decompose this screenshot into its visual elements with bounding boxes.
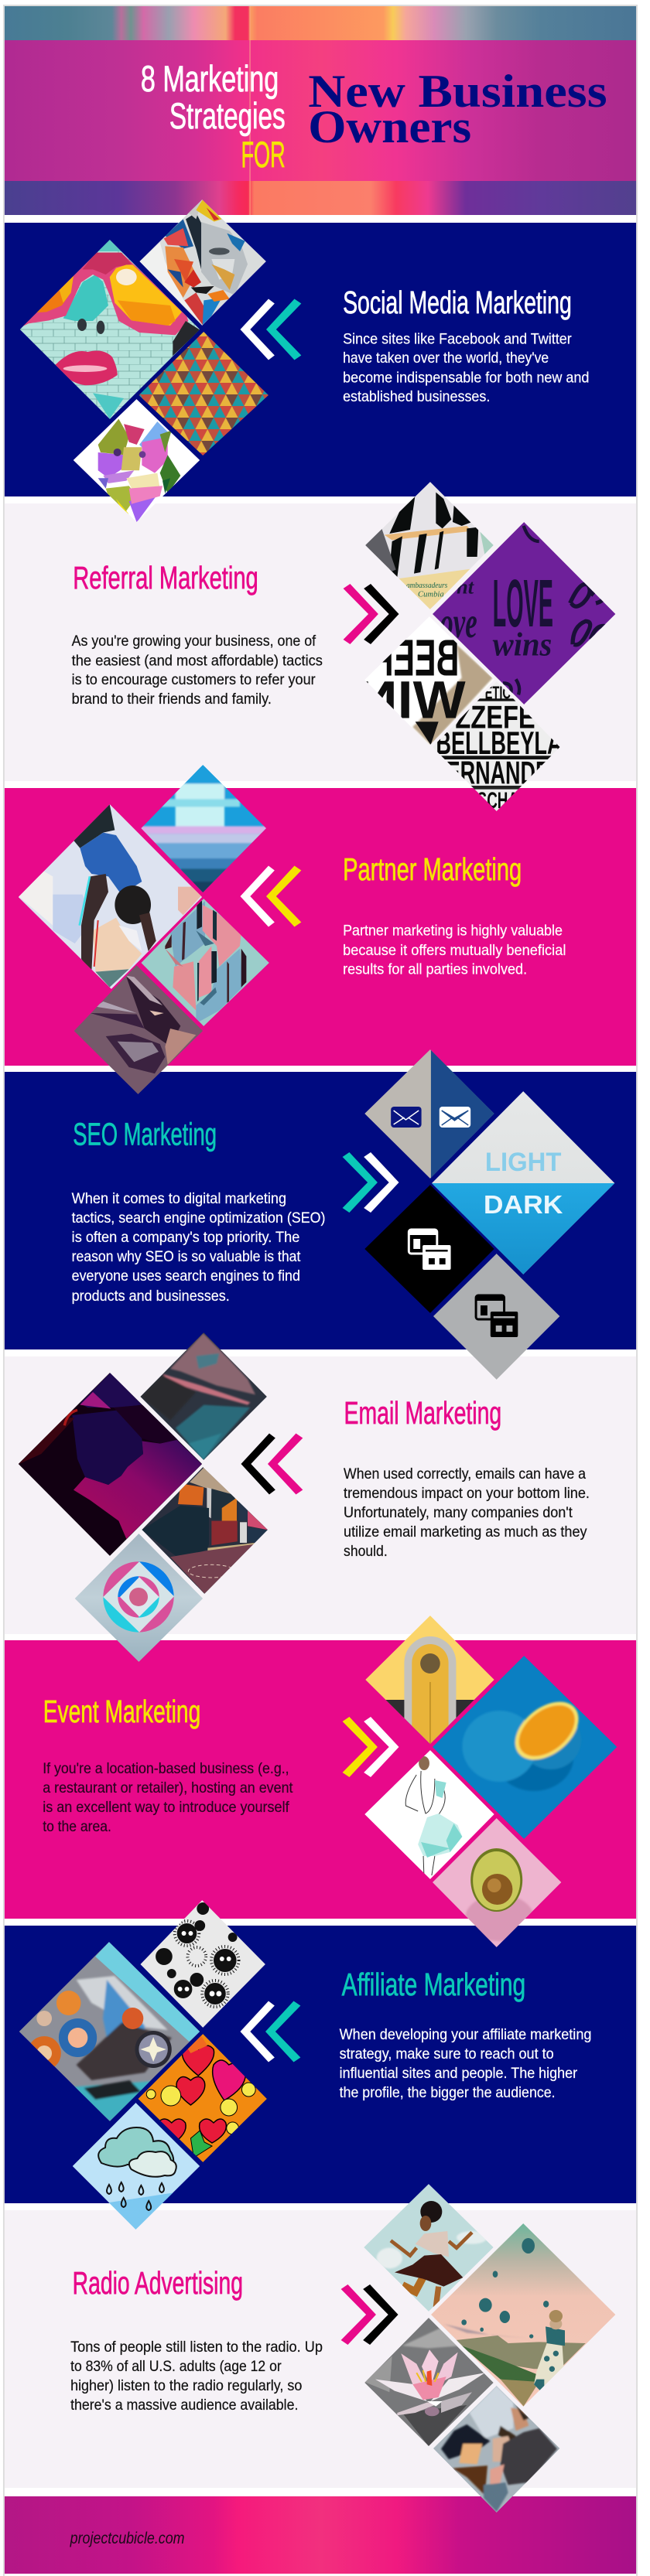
- panel background: SEO: [5, 1072, 636, 1349]
- panel background: social media: [5, 223, 636, 496]
- icon: double chevron: [343, 1717, 399, 1777]
- image: pink and teal architecture: [141, 899, 269, 1026]
- image: soot sprites: [140, 1900, 265, 2028]
- image: colourful cat: [74, 399, 200, 523]
- heading: Email Marketing: [344, 1395, 501, 1431]
- image: lettering poster: Cumbia: [418, 591, 444, 599]
- body text: [70, 2339, 323, 2413]
- image: love wins lettering: [433, 522, 615, 705]
- panel: social media marketing: [18, 200, 589, 523]
- body text: Since sites like Facebook and Twitter: [343, 330, 572, 347]
- body text: higher) listen to the radio regularly, so: [70, 2377, 302, 2393]
- body text: Tons of people still listen to the radio. Up: [70, 2339, 323, 2355]
- image: lettering poster: ambassadeurs: [406, 582, 447, 590]
- title: 8 Marketing Strategies for: [141, 59, 286, 175]
- image: abstract circle logo: [75, 1534, 203, 1662]
- image: dress sketch: [364, 1750, 494, 1879]
- body text: When it comes to digital marketing: [72, 1190, 286, 1206]
- icon: double chevron: [240, 866, 301, 926]
- image: dancing woman: [364, 2184, 494, 2312]
- body text: results for all parties involved.: [343, 960, 527, 978]
- body text: to the area.: [43, 1818, 111, 1834]
- image: person in magenta light: [19, 1373, 202, 1556]
- image: mirrored black letters: BEEF: [374, 629, 459, 687]
- body text: [43, 1760, 293, 1834]
- image: colourful painting: [19, 1942, 200, 2121]
- image: blurred teal and pink: [140, 1332, 267, 1460]
- image: light and dark brick with envelopes: [364, 1049, 494, 1179]
- heading: Radio Advertising: [73, 2265, 243, 2301]
- image: typography collage: ERNANDE: [446, 754, 549, 790]
- body text: When used correctly, emails can have a: [344, 1465, 586, 1482]
- body text: the profile, the bigger the audience.: [340, 2084, 556, 2100]
- image: triangle pattern: [139, 332, 269, 455]
- body text: tremendous impact on your bottom line.: [344, 1485, 590, 1501]
- body text: brand to their friends and family.: [72, 691, 272, 707]
- icon: double chevron: [240, 299, 301, 360]
- image: light and dark typography: LIGHT: [485, 1148, 562, 1177]
- title: 8 Marketing Strategies for: FOR: [241, 135, 286, 175]
- title: 8 Marketing Strategies for: Strategies: [169, 96, 286, 136]
- image: low-poly shape: [74, 965, 203, 1094]
- image: graffiti portrait: [139, 200, 266, 326]
- body text: If you're a location-based business (e.g.,: [43, 1760, 289, 1776]
- body text: [72, 633, 323, 707]
- image: typography collage: ETIC: [485, 682, 511, 702]
- body text: have taken over the world, they've: [343, 350, 549, 366]
- body text: the easiest (and most affordable) tactics: [72, 652, 323, 669]
- title: New Business Owners: Owners: [308, 101, 471, 152]
- body text: because it offers mutually beneficial: [343, 942, 566, 958]
- icon: double chevron: [240, 2001, 300, 2062]
- body text: As you're growing your business, one of: [72, 633, 316, 649]
- panel: radio advertising: [70, 2184, 615, 2513]
- panel: email marketing: [19, 1332, 590, 1662]
- body text: [343, 922, 566, 978]
- body text: Partner marketing is highly valuable: [343, 922, 563, 939]
- body text: tactics, search engine optimization (SEO): [72, 1210, 325, 1226]
- image: typography collage: [433, 681, 563, 814]
- body text: utilize email marketing as much as they: [344, 1523, 587, 1540]
- image: light and dark typography: [432, 1091, 614, 1274]
- image: street art face: [18, 238, 201, 419]
- footer band: [5, 2496, 636, 2574]
- image: rain cloud: [73, 2103, 200, 2230]
- body text: a restaurant or retailer), hosting an event: [43, 1779, 293, 1796]
- title: 8 Marketing Strategies for: 8 Marketing: [141, 59, 279, 99]
- body text: [343, 330, 589, 404]
- image: mirrored black letters: [358, 616, 494, 746]
- body text: [344, 1465, 590, 1559]
- heading: Event Marketing: [43, 1694, 200, 1729]
- image: love wins lettering: ove: [440, 599, 477, 647]
- body text: strategy, make sure to reach out to: [340, 2045, 554, 2062]
- heading: Partner Marketing: [343, 851, 522, 887]
- image: blue orange: [433, 1656, 617, 1839]
- heading: Referral Marketing: [73, 560, 258, 595]
- body text: reason why SEO is so valuable is that: [72, 1248, 301, 1264]
- panel background: partner: [5, 788, 636, 1066]
- image: mirrored black letters: WIN: [358, 670, 466, 729]
- header banner: [5, 6, 636, 215]
- icon: double chevron: [341, 2284, 399, 2345]
- panel background: radio: [5, 2210, 636, 2488]
- image: typography collage: ZZEFE: [455, 699, 535, 735]
- body text: influential sites and people. The higher: [340, 2065, 577, 2081]
- icon: double chevron: [343, 1152, 399, 1213]
- icon: double chevron: [241, 1434, 303, 1494]
- body text: is often a company's top priority. The: [72, 1229, 299, 1245]
- image: typography collage: SCHA: [477, 788, 518, 814]
- image: group of friends: [433, 2386, 560, 2513]
- panel: event marketing: [43, 1616, 617, 1947]
- panel: SEO marketing: [72, 1049, 614, 1380]
- body text: products and businesses.: [72, 1288, 230, 1304]
- title: New Business Owners: New Business: [308, 66, 607, 117]
- body text: is an excellent way to introduce yourself: [43, 1799, 289, 1815]
- panel: partner marketing: [18, 765, 566, 1094]
- panel background: event: [5, 1640, 636, 1919]
- image: yellow door: [365, 1616, 494, 1744]
- footer text: projectcubicle.com: [70, 2530, 185, 2547]
- body text: everyone uses search engines to find: [72, 1268, 300, 1284]
- panel background: affiliate: [5, 1926, 636, 2203]
- image: colourful street scene: [142, 1467, 268, 1594]
- image: lettering poster: [365, 482, 494, 609]
- heading: SEO Marketing: [73, 1116, 217, 1152]
- image: hearts doodle: [138, 2034, 267, 2162]
- title: New Business Owners: [308, 66, 607, 152]
- panel: affiliate marketing: [19, 1900, 591, 2230]
- body text: there's a massive audience available.: [70, 2397, 298, 2413]
- panel background: referral: [5, 503, 636, 781]
- image: typography collage: BELLBEYLA: [436, 725, 563, 761]
- body text: should.: [344, 1543, 388, 1559]
- image: love wins lettering: wins: [493, 626, 552, 663]
- panel background: email: [5, 1356, 636, 1634]
- body text: [72, 1190, 325, 1304]
- image: love wins lettering: nt: [457, 575, 475, 598]
- image: water lily: [364, 2318, 494, 2446]
- image: grey tile with windows icon: [433, 1254, 560, 1380]
- body text: become indispensable for both new and: [343, 369, 589, 386]
- body text: is to encourage customers to refer your: [72, 671, 316, 688]
- image: blue glitch: [139, 765, 269, 893]
- image: light and dark typography: DARK: [484, 1190, 563, 1219]
- body text: established businesses.: [343, 388, 490, 404]
- image: hot air balloons: [431, 2223, 615, 2407]
- panel: referral marketing: [72, 482, 615, 814]
- heading: Affiliate Marketing: [342, 1967, 525, 2002]
- image: avocado: [433, 1818, 561, 1947]
- body text: [340, 2026, 591, 2100]
- body text: Unfortunately, many companies don't: [344, 1504, 573, 1520]
- image: handstand athlete: [18, 804, 202, 989]
- icon: double chevron: [344, 584, 399, 644]
- image: black tile with windows icon: [364, 1185, 494, 1313]
- body text: When developing your affiliate marketing: [340, 2026, 591, 2042]
- body text: to 83% of all U.S. adults (age 12 or: [70, 2358, 282, 2374]
